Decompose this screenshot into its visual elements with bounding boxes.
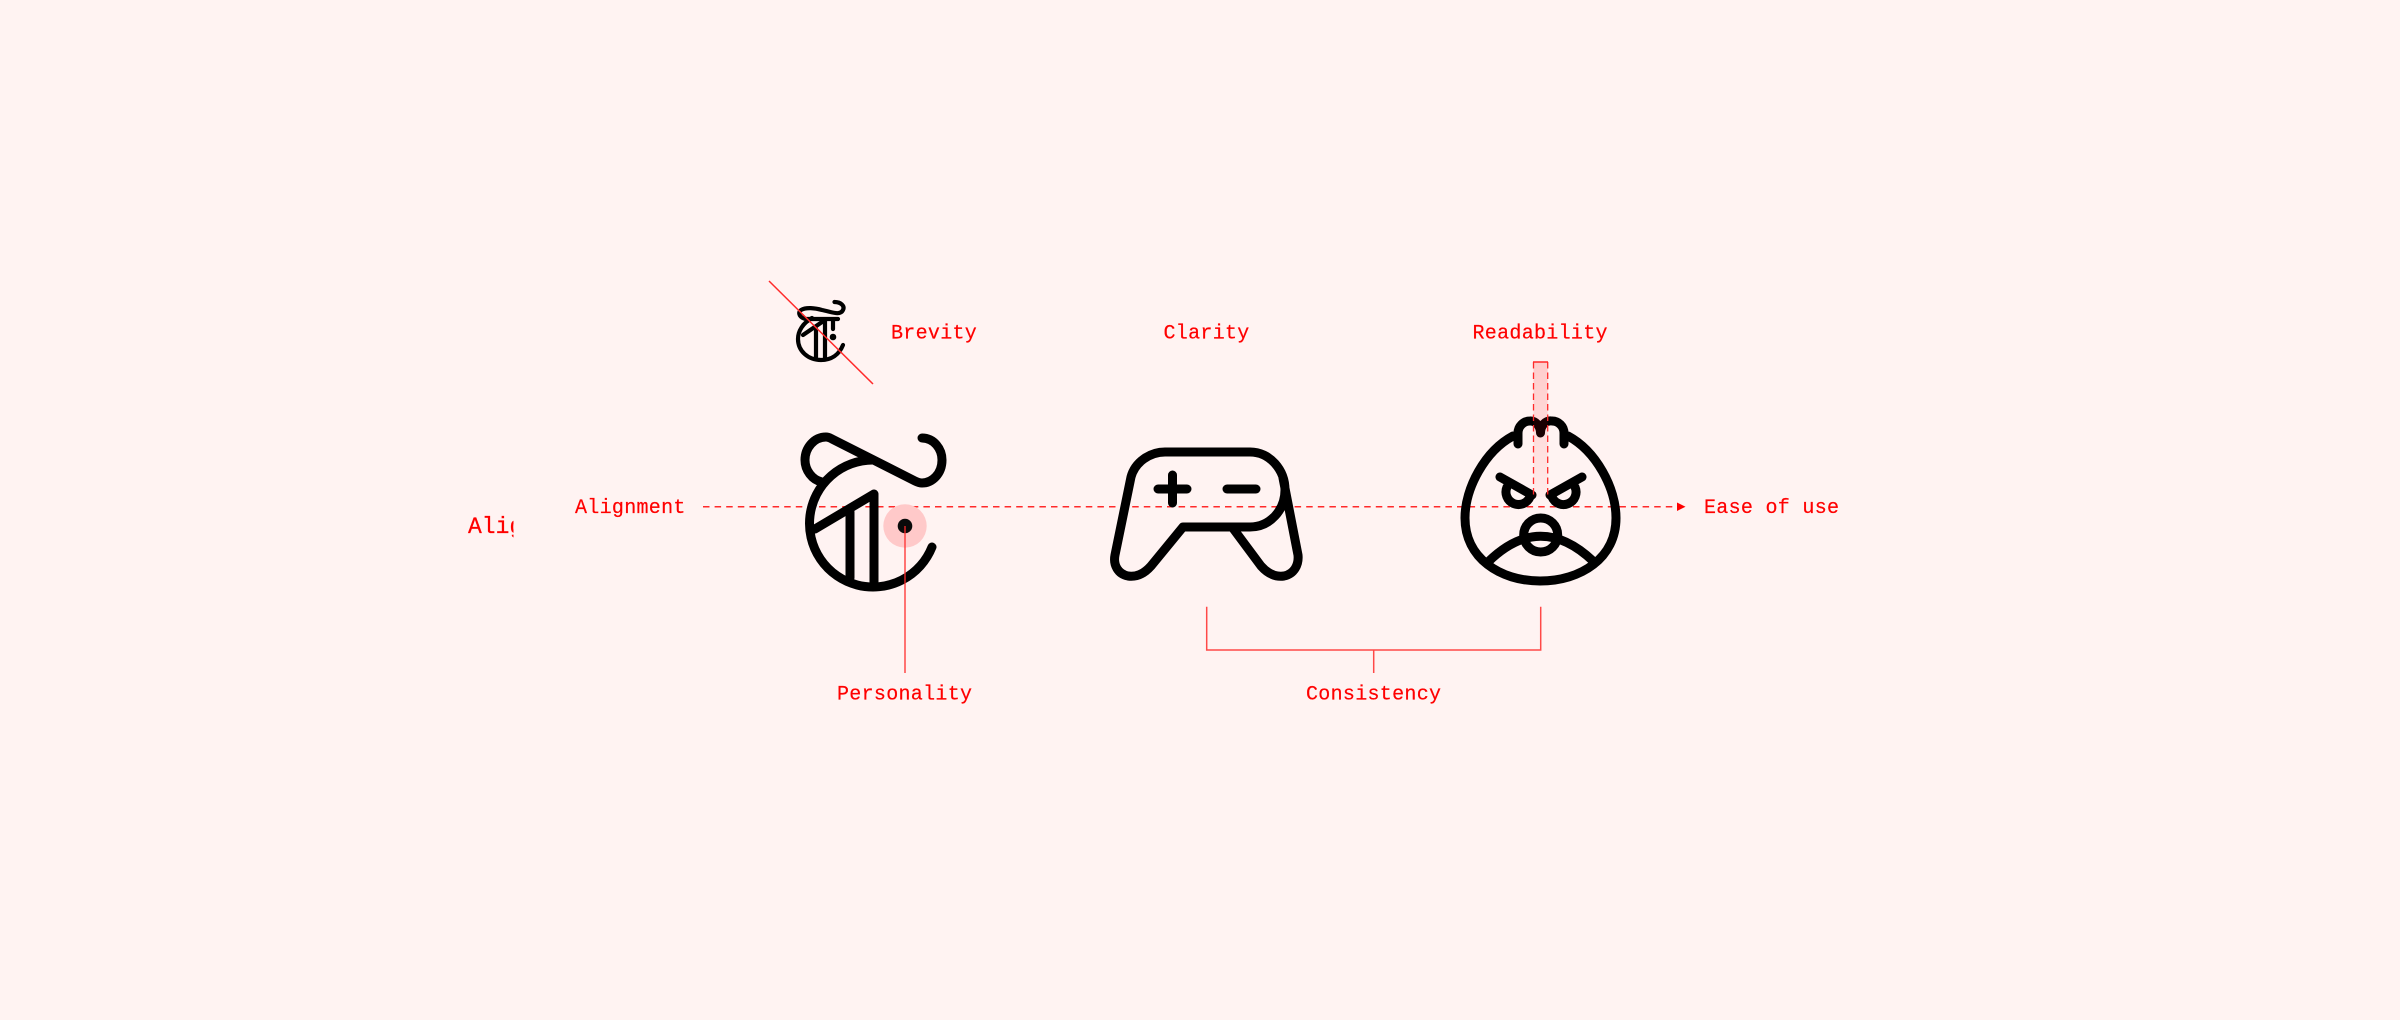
consistency bracket (1207, 607, 1541, 673)
label: Clarity: Clarity (1164, 322, 1250, 346)
clipped label: Alignment ghost: Alignment (468, 514, 592, 540)
label: Personality: Personality (837, 684, 972, 706)
icon: game controller (1115, 452, 1298, 576)
icon: large T logo (805, 437, 942, 587)
readability highlight column (1533, 362, 1548, 497)
label: Readability: Readability (1472, 322, 1608, 346)
strike-through line on logo (769, 281, 873, 384)
leader line to Personality (904, 526, 906, 673)
label: Brevity: Brevity (891, 322, 977, 346)
dashed alignment arrow (703, 502, 1686, 511)
label: Alignment: Alignment (575, 497, 686, 520)
icon: angry bird face (1465, 421, 1616, 581)
icon: small newspaper T logo (798, 302, 844, 360)
label: Ease of use: Ease of use (1704, 497, 1839, 520)
label: Consistency: Consistency (1306, 684, 1441, 706)
personality marker: halo and dot (883, 504, 927, 548)
